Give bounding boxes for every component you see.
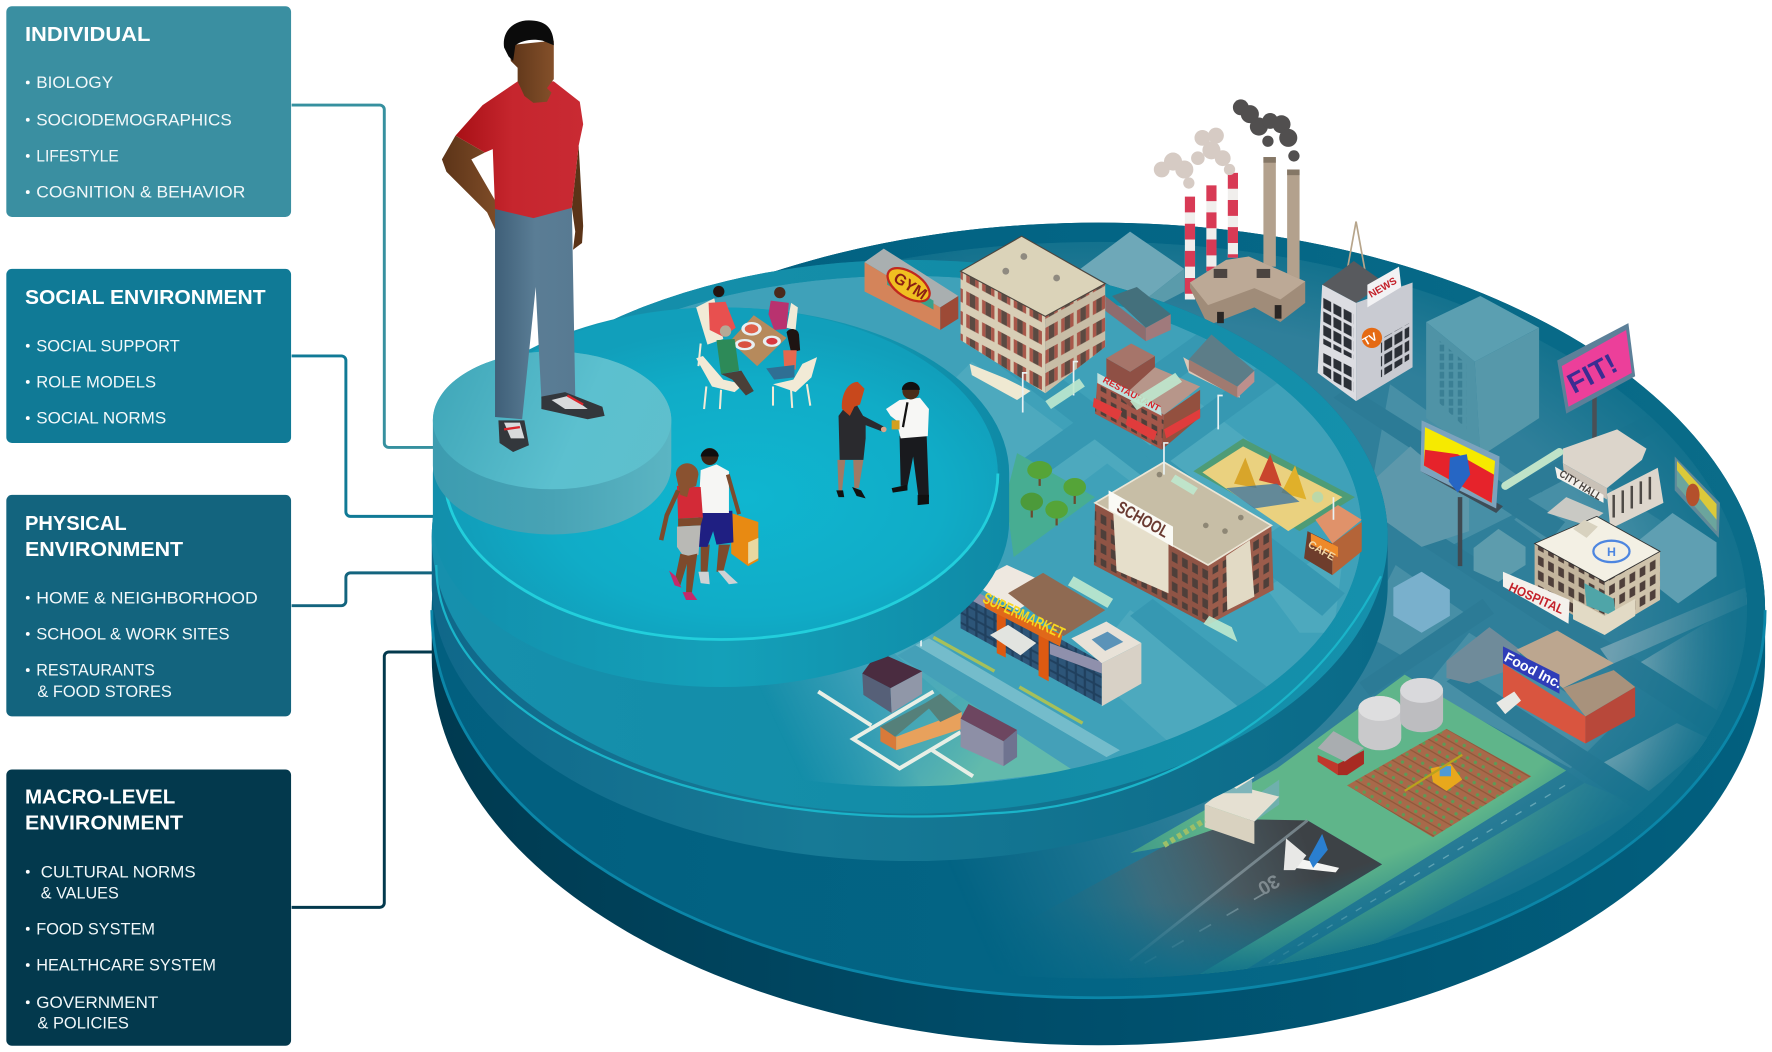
store hedges and street — [933, 637, 1083, 723]
list: physical factors: SCHOOL & WORK SITES — [36, 625, 229, 644]
cafe: CAFE — [1306, 539, 1337, 564]
t-shirt — [455, 81, 583, 218]
tractor — [1405, 755, 1462, 791]
heading: macro-level environment — [25, 786, 184, 834]
list: physical factors — [26, 588, 258, 701]
green land south of road — [1276, 791, 1576, 964]
TV station: TV — [1361, 331, 1380, 349]
heading: physical environment — [25, 513, 184, 561]
connector: macro-level environment — [292, 652, 434, 907]
city hall — [1547, 429, 1663, 529]
airport tower — [1205, 764, 1279, 844]
macro wall — [432, 223, 1765, 1045]
heading: physical environment: ENVIRONMENT — [25, 539, 184, 561]
faded buildings behind billboard — [1367, 446, 1717, 603]
runway — [1082, 820, 1382, 977]
billboard: FIT: FIT! — [1562, 347, 1622, 399]
supermarket — [961, 565, 1141, 706]
panel: individual — [6, 6, 291, 217]
disc: individual layer — [433, 351, 671, 534]
hedge by tower — [1164, 820, 1205, 845]
list: individual factors: LIFESTYLE — [36, 147, 119, 166]
seated person: purple shirt — [768, 287, 789, 330]
businessman — [886, 382, 929, 505]
neck and head — [509, 41, 554, 103]
hospital: H — [1607, 545, 1616, 559]
man in white shirt — [698, 448, 739, 584]
physical streets — [994, 333, 1345, 734]
brown roof — [1008, 573, 1105, 636]
heading: individual: INDIVIDUAL — [25, 24, 150, 46]
couple with suitcase — [661, 448, 758, 600]
crop field — [1347, 729, 1531, 837]
green farm land — [1130, 675, 1566, 979]
macro city ground — [902, 242, 1747, 978]
Food Inc. plant — [1496, 631, 1635, 744]
white house — [1183, 334, 1254, 398]
list: physical factors: HOME & NEIGHBORHOOD — [36, 588, 258, 607]
heading: physical environment: PHYSICAL — [25, 513, 127, 535]
silos — [1358, 678, 1443, 750]
orange portal — [997, 605, 1006, 658]
connector: individual — [292, 105, 434, 447]
TV station — [1318, 221, 1413, 401]
hospital — [1503, 516, 1660, 635]
house: dark roof — [862, 652, 922, 713]
light smoke — [1154, 128, 1235, 189]
billboard: yellow ad — [1420, 420, 1503, 566]
list: macro factors — [26, 862, 216, 1032]
faded tower — [1426, 296, 1539, 457]
gym — [865, 249, 958, 330]
individual wall — [433, 351, 671, 534]
runway: 30 — [1254, 869, 1283, 898]
business people — [836, 382, 929, 505]
factory — [1190, 257, 1305, 325]
macro city blocks — [1374, 384, 1662, 768]
businesswoman — [836, 382, 887, 498]
supermarket: SUPERMARKET — [980, 590, 1067, 643]
list: macro factors: FOOD SYSTEM — [36, 919, 155, 938]
cafe — [1304, 505, 1362, 575]
woman in red top — [661, 463, 703, 600]
social wall — [433, 307, 1009, 687]
physical city ground — [680, 276, 1362, 786]
chairs — [696, 298, 817, 392]
playground — [1193, 438, 1355, 531]
TV station: NEWS — [1367, 276, 1399, 301]
table top — [730, 315, 787, 366]
restaurant — [1093, 344, 1200, 450]
macro diagonal road — [1271, 771, 1584, 966]
seated person: red shirt — [709, 286, 736, 337]
right shoe — [541, 392, 605, 419]
disc: macro-level layer — [432, 99, 1765, 1045]
hair — [504, 20, 554, 61]
airplane — [1284, 834, 1339, 872]
dark smoke — [1233, 99, 1300, 162]
lamp posts — [921, 362, 1333, 646]
panel: macro-level environment — [6, 770, 291, 1046]
suitcase — [731, 513, 758, 566]
left glass front — [961, 583, 1102, 705]
faded block buildings — [1393, 529, 1526, 684]
list: macro factors: CULTURAL NORMS — [41, 862, 196, 881]
left arm — [442, 136, 506, 229]
grey faded building — [1080, 232, 1184, 311]
green hedges — [1045, 373, 1237, 642]
individual top surface — [433, 351, 671, 489]
right arm — [572, 146, 583, 250]
billboard: FIT — [1557, 323, 1635, 441]
macro rim highlight — [432, 610, 1765, 998]
macro light corner blocks — [1604, 622, 1710, 791]
connector: social environment — [292, 356, 434, 516]
sidewalk — [915, 638, 1120, 757]
disc: physical environment layer — [432, 236, 1388, 861]
road dashes — [1254, 785, 1565, 972]
panel: social environment — [6, 269, 291, 443]
neighborhood paths — [818, 692, 973, 776]
list: physical factors: RESTAURANTS — [36, 661, 155, 680]
hedge row — [1505, 452, 1559, 486]
restaurant: RESTAURANT — [1101, 375, 1162, 414]
billboard: burger — [1675, 457, 1720, 538]
seated person: pink shirt — [766, 329, 800, 380]
disc: social environment layer — [433, 286, 1009, 687]
list: social factors: SOCIAL NORMS — [36, 409, 166, 428]
house: purple — [961, 704, 1017, 766]
list: macro factors: & POLICIES — [37, 1013, 129, 1032]
heading: social environment: SOCIAL ENVIRONMENT — [25, 287, 266, 309]
list: individual factors: BIOLOGY — [36, 73, 113, 92]
seated person: green shirt — [717, 325, 754, 395]
hotel canopy — [970, 364, 1031, 400]
list: macro factors: & VALUES — [41, 883, 119, 902]
heading: macro-level environment: MACRO-LEVEL — [25, 786, 175, 808]
list: macro factors: GOVERNMENT — [36, 993, 158, 1012]
list: individual factors — [26, 73, 245, 202]
list: macro factors: HEALTHCARE SYSTEM — [36, 956, 216, 975]
panel: physical environment — [6, 495, 291, 716]
small pink house — [1105, 287, 1171, 341]
left shoe — [498, 420, 529, 452]
physical city blocks — [895, 362, 1342, 740]
physical rim highlight — [436, 565, 1381, 816]
food — [735, 322, 781, 350]
table with four people — [696, 286, 817, 409]
social top surface — [444, 307, 998, 640]
school: SCHOOL — [1114, 497, 1172, 541]
macro streets — [1382, 409, 1747, 796]
macro top surface — [432, 223, 1765, 998]
chimneys: red and white — [1190, 173, 1233, 299]
connector: physical environment — [292, 573, 434, 606]
list: individual factors: SOCIODEMOGRAPHICS — [36, 110, 232, 129]
back white roof — [972, 565, 1057, 610]
list: physical factors: & FOOD STORES — [37, 682, 172, 701]
city hall: CITY HALL — [1557, 468, 1604, 503]
heading: macro-level environment: ENVIRONMENT — [25, 812, 184, 834]
list: individual factors: COGNITION & BEHAVIOR — [36, 183, 245, 202]
school — [1094, 462, 1274, 625]
trousers — [495, 208, 575, 419]
neighborhood lawn — [888, 695, 1071, 786]
list: social factors: ROLE MODELS — [36, 373, 156, 392]
right block — [1071, 621, 1141, 663]
list: social factors: SOCIAL SUPPORT — [36, 336, 180, 355]
physical top surface — [432, 260, 1388, 814]
hospital: HOSPITAL — [1507, 579, 1566, 617]
rim shading — [901, 242, 1747, 978]
tan stacks — [1263, 157, 1300, 280]
social rim highlight — [444, 473, 998, 640]
Food Inc. plant: Food Inc. — [1502, 649, 1565, 691]
physical wall — [432, 260, 1388, 861]
figure: standing man — [442, 20, 605, 452]
list: social factors — [26, 336, 180, 428]
neighborhood road — [897, 645, 1106, 771]
hotel — [961, 236, 1105, 400]
house: orange — [880, 694, 962, 750]
park — [1006, 453, 1095, 557]
barn — [1318, 731, 1364, 775]
gym: GYM — [890, 270, 930, 304]
